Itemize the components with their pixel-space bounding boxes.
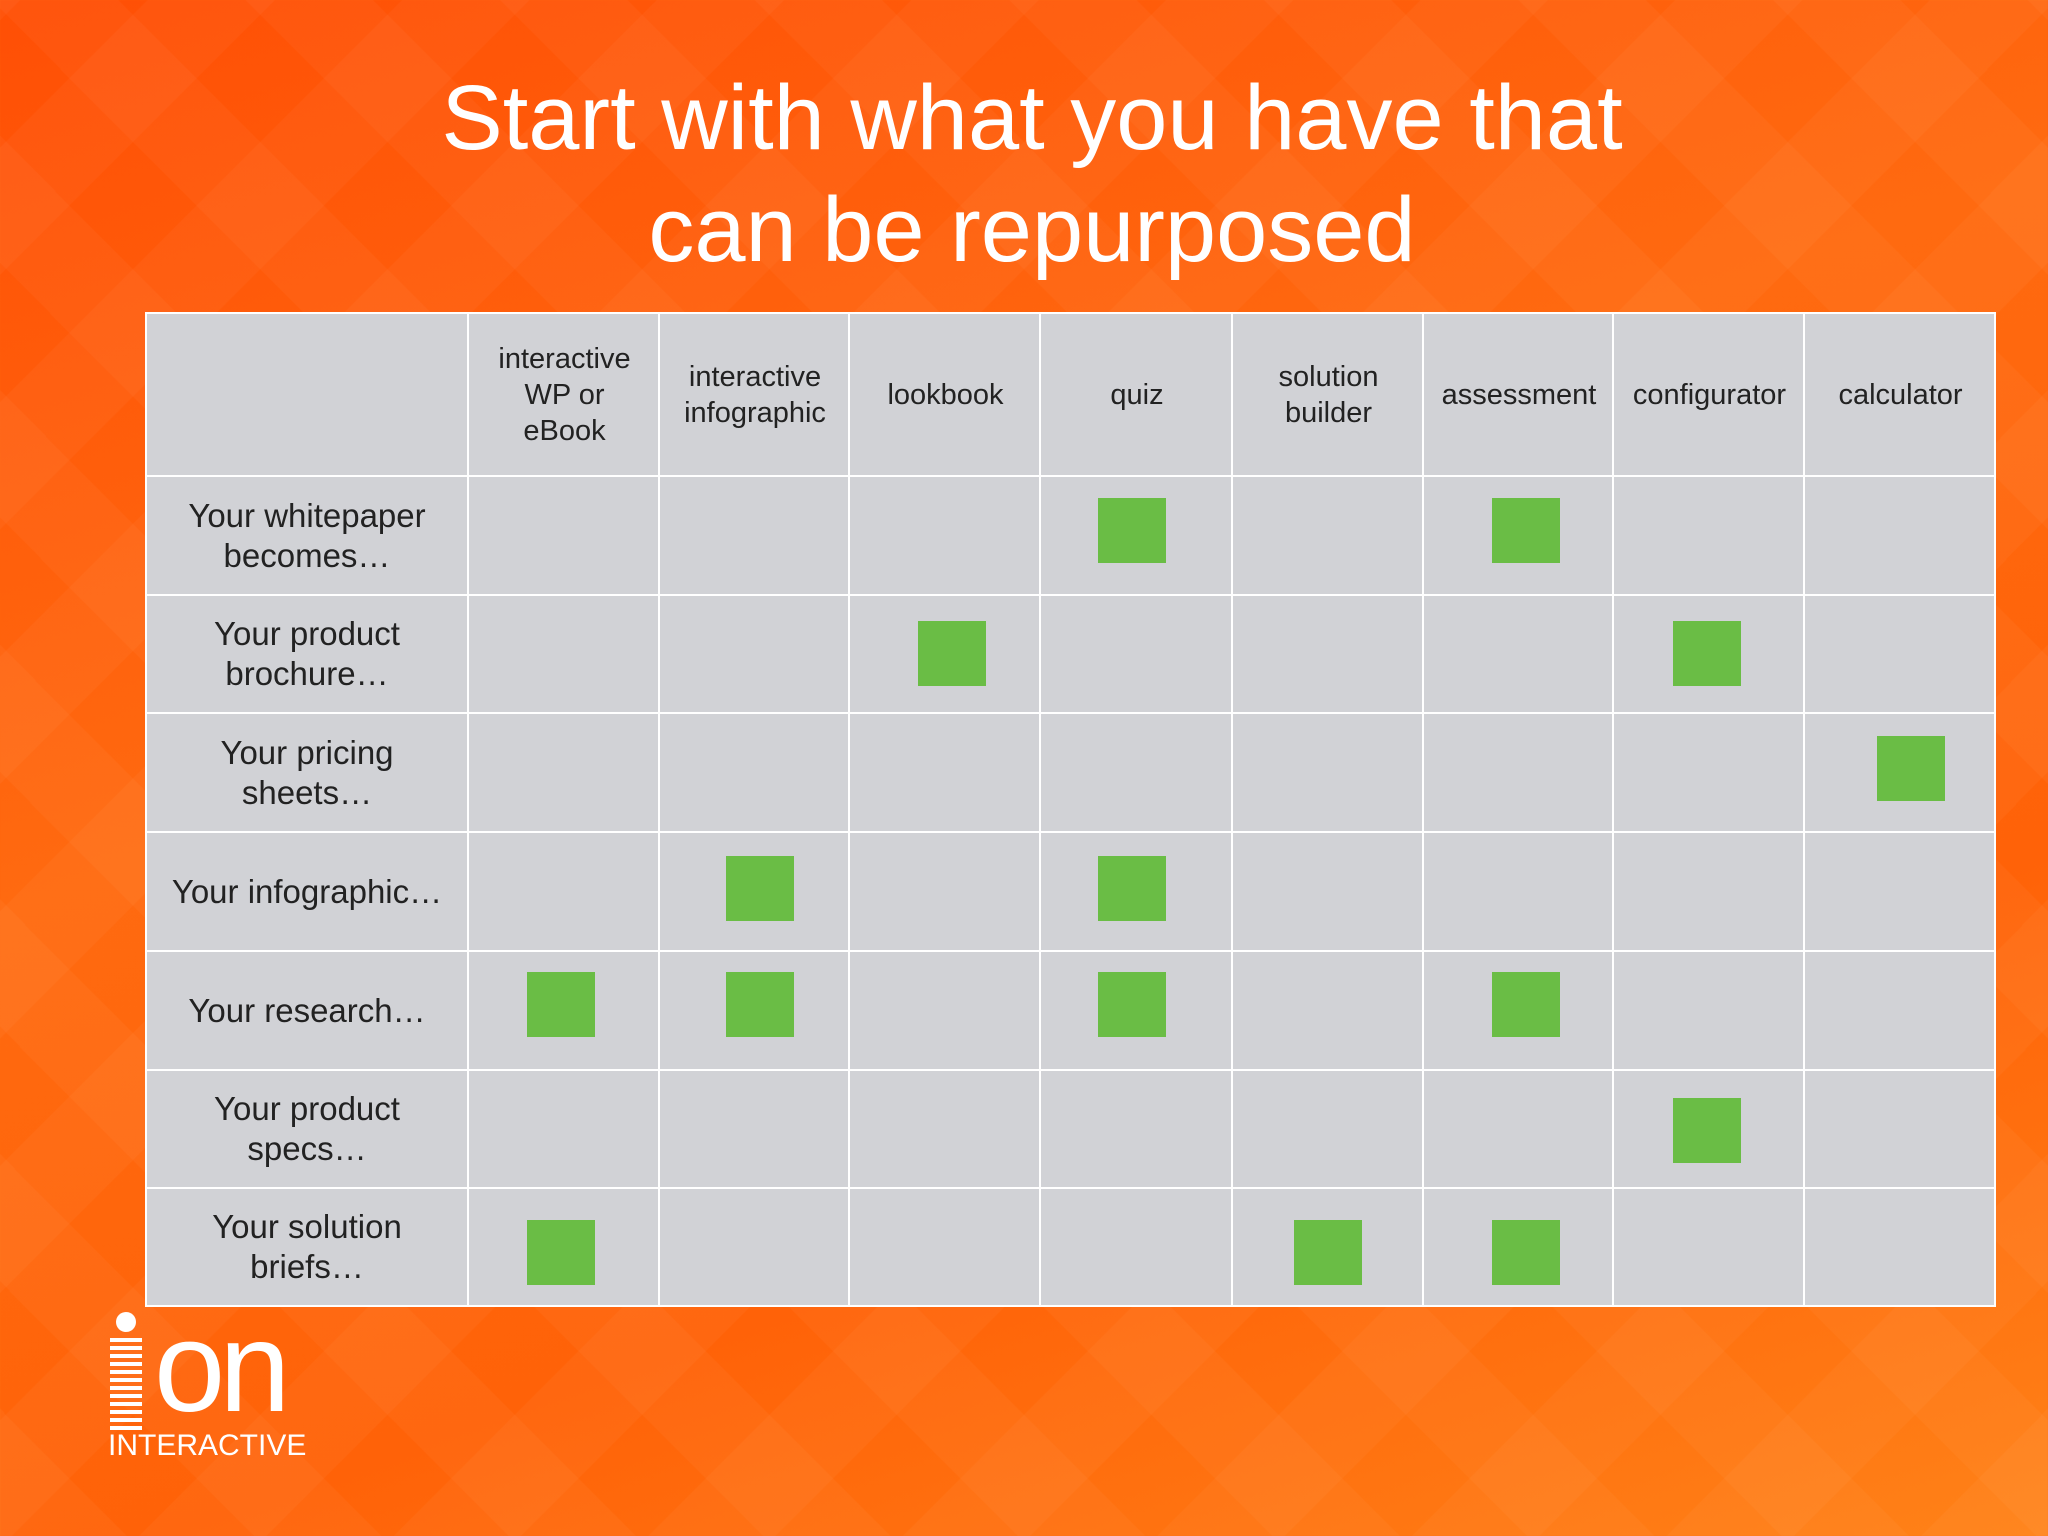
logo: ion interactive: on [154,1296,284,1439]
table grid: Your whitepaper [188,496,426,534]
table grid: becomes… [224,536,390,574]
logo: ion interactive: INTERACTIVE [108,1429,306,1462]
table grid: calculator [1838,378,1963,410]
table grid: Your research… [188,992,426,1028]
logo: ion interactive [108,1296,306,1462]
table grid: WP or [524,378,605,410]
table grid: specs… [247,1130,367,1167]
green markers [527,498,1945,1285]
title: can be repurposed [648,179,1416,281]
table grid: builder [1285,396,1372,428]
title: Start with what you have that [441,67,1623,169]
table grid: Your pricing [220,734,394,770]
table grid: briefs… [250,1248,364,1285]
table grid: assessment [1442,378,1596,410]
table grid: interactive [689,360,821,392]
header cells [498,342,1963,446]
row labels [172,496,442,1285]
table grid: infographic [684,396,826,428]
table grid: solution [1279,360,1378,392]
table grid: sheets… [242,774,372,810]
table grid [145,312,1996,1307]
table grid: lookbook [887,378,1004,410]
table grid: Your product [214,615,400,652]
table grid: brochure… [225,655,389,692]
table grid: eBook [523,414,606,446]
table grid: Your solution [212,1208,402,1245]
table grid: interactive [498,342,631,374]
table grid: quiz [1110,378,1164,410]
table grid: Your product [214,1090,400,1127]
table grid: Your infographic… [172,872,442,910]
title [441,67,1623,281]
table grid: configurator [1633,378,1786,410]
